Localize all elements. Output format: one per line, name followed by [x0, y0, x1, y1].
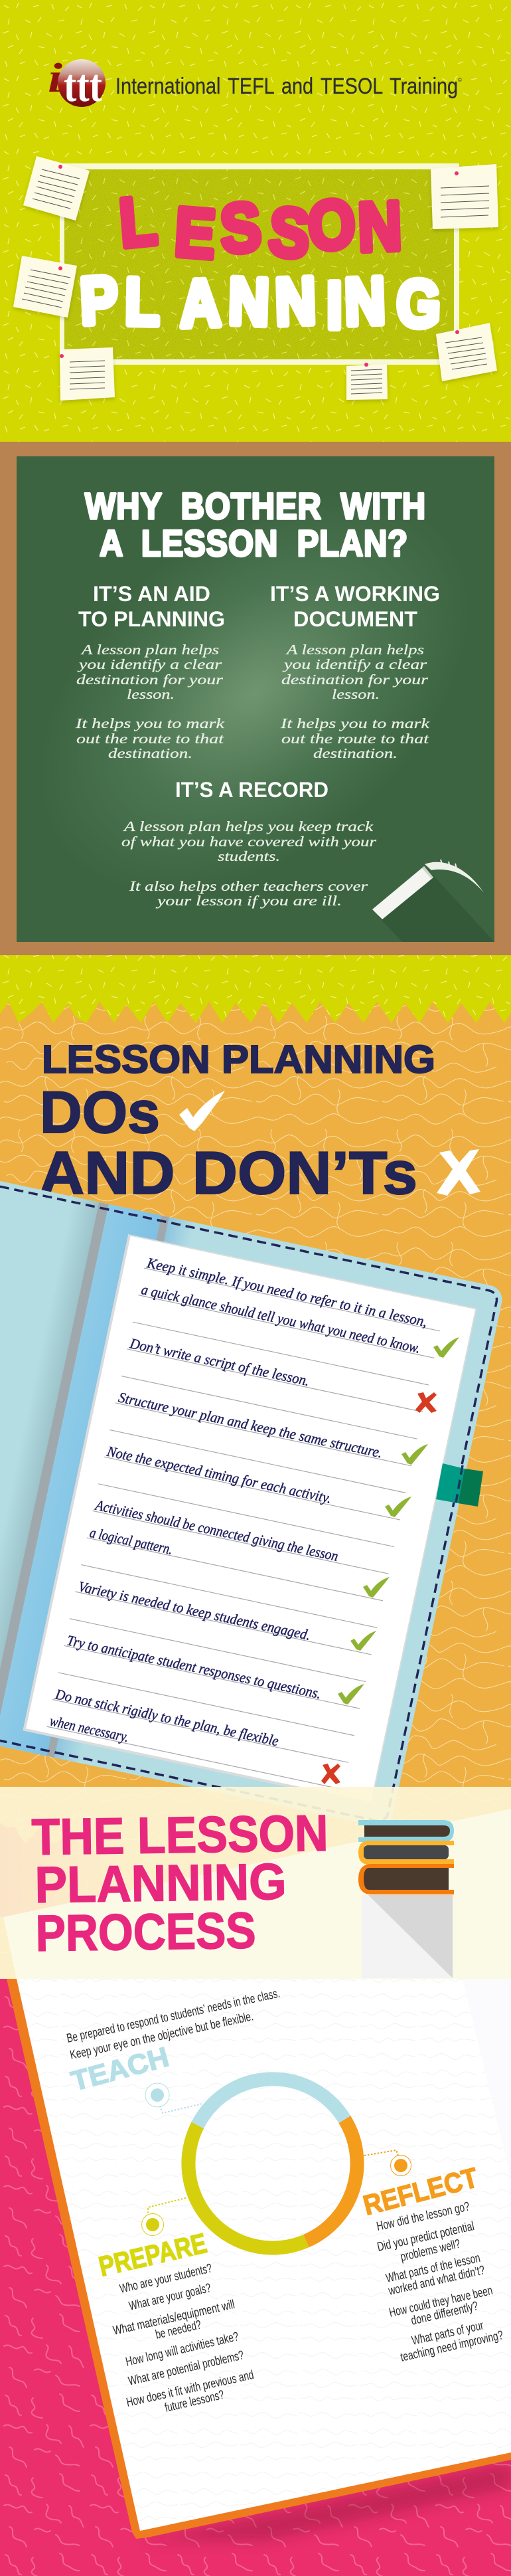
reflect questions — [376, 2199, 504, 2365]
column: working document: out the route to that — [281, 731, 430, 747]
bottom book — [358, 1864, 454, 1894]
handwritten list: Don’t write a script of the lesson. — [128, 1334, 311, 1389]
heading: lesson planning process — [31, 1805, 328, 1962]
arc: prepare — [188, 2125, 306, 2248]
reflect questions: done differently? — [409, 2299, 479, 2328]
column: aid to planning: out the route to that — [76, 731, 225, 747]
heading: dos and don'ts: AND DON’Ts — [39, 1140, 417, 1207]
middle book — [358, 1841, 454, 1865]
panel: process page — [17, 1979, 511, 2531]
prepare questions: How does it fit with previous and — [125, 2368, 255, 2410]
column: working document: destination for your — [281, 672, 429, 688]
handwritten list: Try to anticipate student responses to questions. — [66, 1631, 323, 1702]
tick 3 — [385, 1497, 411, 1517]
prepare label: PREPARE — [96, 2227, 210, 2282]
list marks — [321, 1337, 459, 1784]
arc: teach — [198, 2079, 344, 2125]
reflect questions: What parts of your — [411, 2318, 485, 2348]
chalkboard surface — [17, 456, 494, 942]
background: pink section — [0, 1979, 511, 2576]
heading: dos and don'ts — [39, 1038, 435, 1207]
tick 6 — [338, 1684, 364, 1704]
column: working document: lesson. — [332, 686, 380, 702]
prepare questions: Who are your students? — [118, 2261, 213, 2296]
note 5 — [346, 363, 388, 400]
title: planning: PLANNING — [78, 262, 441, 343]
handwritten list: when necessary. — [48, 1712, 130, 1745]
column: record: students. — [218, 848, 280, 864]
column: aid to planning: destination. — [108, 745, 192, 761]
column: working document: A lesson plan helps — [285, 642, 424, 658]
intro text: Be prepared to respond to students’ needs in the class. — [66, 1987, 281, 2046]
notebook cover — [0, 1164, 505, 1829]
column: working document: It helps you to mark — [280, 715, 430, 731]
column: aid to planning — [75, 582, 225, 761]
cycle ring — [188, 2079, 357, 2248]
title: lesson: LESSON — [117, 181, 403, 273]
column: aid to planning: A lesson plan helps — [80, 642, 219, 658]
icon: bookmark tab — [436, 1463, 483, 1507]
logo emblem — [48, 56, 106, 112]
prepare questions — [112, 2261, 255, 2415]
column: record: your lesson if you are ill. — [155, 893, 342, 909]
panel: chalkboard — [0, 442, 511, 955]
icon: white tick — [179, 1091, 225, 1131]
paper sheet — [23, 1234, 476, 1805]
handwritten list: Keep it simple. If you need to refer to it in a lesson, — [145, 1254, 429, 1330]
shadow under page — [143, 2463, 511, 2541]
reflect questions: Did you predict potential — [376, 2219, 476, 2254]
column: aid to planning: TO PLANNING — [78, 607, 225, 631]
heading: dos and don'ts: DOs — [40, 1079, 160, 1145]
prepare questions: future lessons? — [163, 2388, 226, 2415]
column: working document: you identify a clear — [282, 656, 427, 672]
reflect questions: How did the lesson go? — [376, 2199, 471, 2234]
prepare questions: What are potential problems? — [127, 2348, 246, 2389]
sticky notes — [13, 156, 498, 401]
tick 2 — [402, 1444, 428, 1465]
column: working document — [270, 582, 440, 761]
prepare questions: What are your goals? — [127, 2281, 212, 2314]
heading: why bother — [85, 485, 426, 564]
column: record: It also helps other teachers cover — [129, 878, 368, 894]
note 2 — [13, 256, 77, 318]
handwritten list: Variety is needed to keep students engaged. — [77, 1578, 312, 1643]
note 1 — [23, 156, 90, 221]
column: working document: DOCUMENT — [293, 607, 417, 631]
column: aid to planning: lesson. — [127, 686, 175, 702]
prepare questions: What materials/equipment will — [112, 2298, 236, 2338]
column: aid to planning: destination for your — [76, 672, 224, 688]
icon: white cross — [437, 1149, 480, 1196]
background: lime header — [0, 0, 511, 1036]
handwritten list: Note the expected timing for each activity. — [105, 1443, 333, 1507]
logo emblem: ttt — [64, 60, 102, 112]
copyright mark: © — [458, 77, 462, 83]
column: aid to planning: It helps you to mark — [75, 715, 225, 731]
handwritten list — [47, 1254, 429, 1788]
cross 1 — [415, 1392, 437, 1413]
ruled lines — [46, 1268, 440, 1790]
column: working document: IT’S A WORKING — [270, 582, 440, 606]
logo — [48, 56, 462, 112]
handwritten list: a logical pattern. — [88, 1524, 175, 1558]
handwritten list: a quick glance should tell you what you need to know. — [140, 1281, 422, 1356]
reflect questions: problems well? — [399, 2237, 462, 2264]
handwritten list: Do not stick rigidly to the plan, be flexible — [53, 1685, 280, 1749]
handwritten list: Structure your plan and keep the same structure. — [117, 1389, 384, 1461]
top book — [358, 1820, 454, 1842]
column: record: IT’S A RECORD — [175, 778, 328, 802]
intro text: Keep your eye on the objective but be flexible. — [69, 2009, 255, 2063]
prepare label — [96, 2198, 210, 2282]
teach label — [68, 2041, 202, 2113]
panel: notebook — [0, 1164, 505, 1829]
teach label: TEACH — [68, 2041, 172, 2097]
background: orange section with zigzag — [0, 1002, 511, 1986]
heading: why bother: A LESSON PLAN? — [100, 522, 408, 564]
prepare questions: be needed? — [154, 2318, 202, 2342]
column: record: A lesson plan helps you keep track — [122, 818, 374, 834]
heading: lesson planning process: PROCESS — [35, 1902, 256, 1962]
board: lesson planning title — [60, 163, 459, 365]
column: aid to planning: you identify a clear — [77, 656, 222, 672]
note 6 — [436, 323, 497, 381]
column: aid to planning: IT’S AN AID — [93, 582, 210, 606]
notebook spine — [0, 1202, 109, 1745]
icon: stack of books — [358, 1820, 454, 1978]
heading: why bother: WHY BOTHER WITH — [85, 485, 426, 527]
heading: lesson planning process: THE LESSON — [31, 1805, 328, 1866]
note 3 — [431, 164, 498, 229]
tick 4 — [363, 1577, 390, 1598]
lighter paper band — [3, 1809, 511, 1979]
logo wordmark: International TEFL and TESOL Training — [115, 74, 458, 99]
panel: process header wash — [0, 1787, 511, 1979]
handwritten list: Activities should be connected giving the lesson — [93, 1497, 340, 1564]
arc: reflect — [306, 2120, 357, 2241]
icon: chalk — [372, 860, 484, 919]
chalkboard frame — [0, 442, 511, 955]
reflect label: REFLECT — [360, 2162, 481, 2221]
column: working document: destination. — [313, 745, 398, 761]
tick 1 — [433, 1337, 459, 1358]
prepare questions: How long will activities take? — [124, 2330, 240, 2369]
tick 5 — [350, 1631, 376, 1651]
logo emblem: i — [48, 56, 62, 101]
page orange edge — [7, 1979, 511, 2539]
column: record — [121, 778, 377, 909]
heading: dos and don'ts: LESSON PLANNING — [42, 1038, 435, 1081]
stitching — [0, 1169, 498, 1823]
chalk shadow — [378, 875, 494, 942]
column: record: of what you have covered with your — [121, 834, 377, 850]
heading: lesson planning process: PLANNING — [35, 1853, 287, 1914]
cross 2 — [321, 1764, 340, 1784]
note 4 — [60, 347, 115, 401]
